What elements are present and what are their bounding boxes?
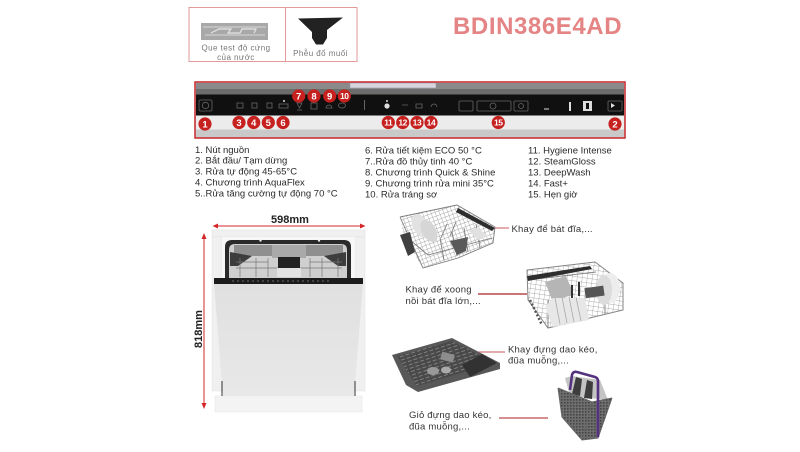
label: cutlery tray: [478, 344, 598, 366]
legend: column 1: 5..Rửa tăng cường tự động 70 °C: [195, 188, 338, 200]
badge numbers: 11: [384, 118, 393, 128]
legend: column 3: [528, 146, 612, 200]
legend: column 1: 4. Chương trình AquaFlex: [195, 178, 305, 188]
label: cutlery tray: Khay đựng dao kéo,: [508, 344, 598, 356]
badge numbers: 8: [311, 92, 317, 102]
label: cutlery basket: Giỏ đựng dao kéo,: [409, 410, 491, 421]
icon: water hardness test strip: [201, 23, 268, 40]
dimension: width: 598mm: [271, 214, 309, 226]
badge numbers: 1: [202, 120, 208, 130]
label: test strip second line: của nước: [217, 53, 255, 62]
badge numbers: 14: [427, 118, 436, 128]
legend: column 1: 3. Rửa tự động 45-65°C: [195, 166, 297, 178]
label: cutlery basket: [409, 410, 548, 432]
legend: column 3: 15. Hẹn giờ: [528, 190, 578, 200]
icon: panel indicators: [283, 100, 615, 111]
legend: column 1: 1. Nút nguồn: [195, 145, 249, 156]
legend: column 3: 12. SteamGloss: [528, 156, 596, 168]
legend: column 1: [195, 145, 338, 200]
dimension: width: [212, 214, 366, 228]
dishwasher illustration: [212, 230, 365, 412]
label: salt funnel: Phễu đổ muối: [293, 49, 348, 58]
badge numbers: 3: [236, 118, 242, 129]
illustration: cutlery basket: [558, 372, 612, 440]
badge numbers: 13: [413, 118, 422, 128]
label: lower rack: [406, 284, 527, 307]
badge numbers: 15: [494, 118, 503, 128]
panel: accessories: [189, 8, 357, 62]
legend: column 3: 11. Hygiene Intense: [528, 146, 612, 156]
badge numbers: 10: [340, 91, 349, 101]
legend: column 3: 14. Fast+: [528, 178, 568, 190]
badge numbers: [202, 91, 618, 130]
badge numbers: 4: [251, 118, 257, 129]
label: lower rack: Khay để xoong: [406, 284, 472, 296]
dimension: height: [193, 233, 206, 409]
badge numbers: 6: [280, 118, 286, 129]
badge numbers: 12: [398, 118, 408, 128]
legend: column 2: 10. Rửa tráng sơ: [365, 190, 437, 200]
legend: column 2: 6. Rửa tiết kiệm ECO 50 °C: [365, 146, 482, 156]
legend: column 3: 13. DeepWash: [528, 168, 590, 178]
legend: column 2: 9. Chương trình rửa mini 35°C: [365, 178, 494, 190]
legend: column 1: 2. Bắt đầu/ Tạm dừng: [195, 156, 287, 166]
icon: salt funnel: [298, 18, 343, 44]
dimension: height: 818mm: [193, 310, 205, 348]
title: model name: BDIN386E4AD: [453, 13, 622, 40]
label: test strip: Que test độ cứng: [201, 44, 271, 52]
icons: panel buttons: [199, 100, 622, 111]
illustration: lower rack: [527, 262, 623, 328]
illustration: upper rack: [400, 205, 495, 268]
legend: column 2: [365, 146, 495, 200]
label: lower rack: nồi bát đĩa lớn,...: [406, 296, 481, 307]
legend: column 2: 8. Chương trình Quick & Shine: [365, 168, 495, 178]
badge numbers: 2: [612, 120, 618, 130]
label: cutlery tray: đũa muỗng,...: [508, 356, 569, 366]
badge numbers: 7: [296, 92, 301, 102]
badges: numbered markers: [198, 89, 622, 131]
panel: control panel: [195, 82, 625, 138]
legend: column 2: 7..Rửa đồ thủy tinh 40 °C: [365, 156, 472, 168]
label: cutlery basket: đũa muỗng,...: [409, 422, 470, 432]
label: upper rack: Khay để bát đĩa,...: [512, 224, 593, 235]
illustration: cutlery tray: [392, 338, 500, 392]
badge numbers: 9: [327, 92, 332, 102]
badge numbers: 5: [266, 118, 272, 129]
